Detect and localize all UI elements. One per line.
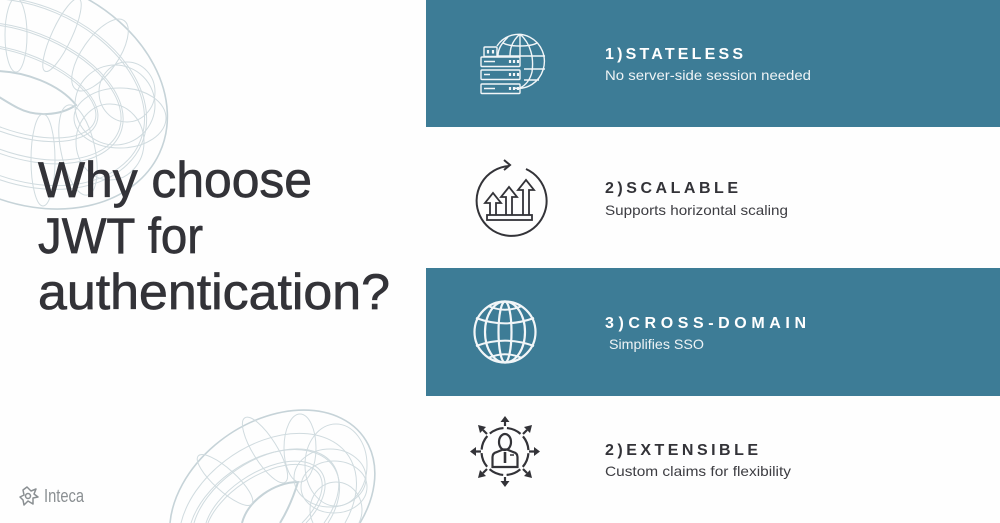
description: Custom claims for flexibility: [605, 463, 791, 479]
logo wordmark: Inteca: [44, 486, 85, 506]
title: authentication?: [38, 264, 390, 320]
panel: scalable: [477, 160, 788, 236]
icon: servers and globe: [481, 34, 545, 94]
description: Supports horizontal scaling: [605, 202, 788, 218]
description: Simplifies SSO: [609, 336, 704, 352]
panel: extensible: [470, 416, 791, 487]
icon: Inteca star: [20, 487, 38, 505]
icon: globe: [474, 302, 536, 362]
decorative torus: bottom: [170, 410, 375, 523]
heading: 2)EXTENSIBLE: [605, 442, 758, 459]
heading: 3)CROSS-DOMAIN: [605, 315, 806, 332]
logo: Inteca: [20, 486, 85, 506]
decorative torus: top left: [0, 0, 168, 210]
heading: 2)SCALABLE: [605, 180, 738, 197]
title: Why choose: [38, 152, 312, 208]
heading: 1)STATELESS: [605, 46, 743, 63]
description: No server-side session needed: [605, 67, 811, 83]
panel: cross-domain: [426, 268, 1000, 396]
icon: person with outward arrows: [470, 416, 540, 487]
icon: rising arrows in circle: [477, 160, 547, 236]
panel: stateless: [426, 0, 1000, 127]
title: JWT for: [38, 208, 203, 264]
